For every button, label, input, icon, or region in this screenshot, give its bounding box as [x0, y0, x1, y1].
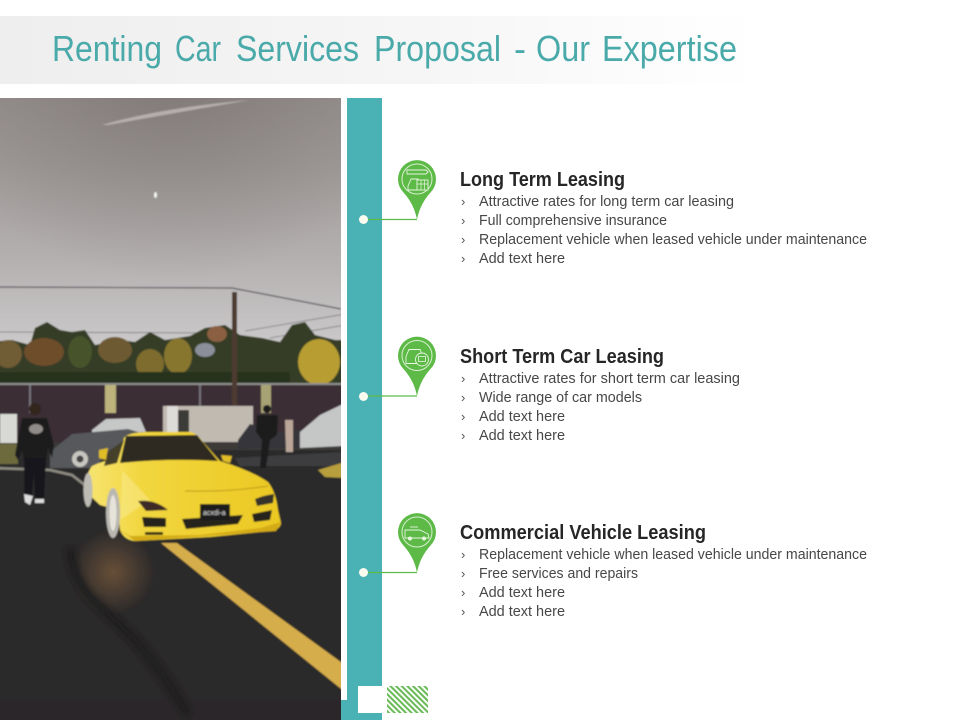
car — [84, 432, 281, 541]
title: Car — [175, 28, 221, 69]
bullet list: › — [461, 213, 465, 228]
bullet list: Replacement vehicle when leased vehicle under maintenance — [479, 232, 867, 248]
connector with dot — [359, 392, 417, 401]
bullet list: › — [461, 232, 465, 247]
bullet list — [461, 371, 740, 444]
item: long term leasing — [359, 160, 867, 267]
car: acxdi-a — [203, 510, 226, 517]
title: - — [514, 28, 526, 69]
title: Expertise — [602, 28, 737, 69]
icon: map pin with car lease — [398, 160, 436, 220]
background cars — [92, 418, 146, 434]
bullet list: Add text here — [479, 604, 565, 620]
bullet list: › — [461, 371, 465, 386]
connector with dot — [359, 215, 417, 224]
bullet list: › — [461, 251, 465, 266]
bullet list: Attractive rates for long term car leasing — [479, 194, 734, 210]
bullet list: › — [461, 194, 465, 209]
heading: Long Term Leasing — [460, 169, 625, 191]
connector with dot — [359, 568, 417, 577]
item: commercial vehicle leasing — [359, 513, 867, 620]
bullet list: › — [461, 585, 465, 600]
bullet list: Add text here — [479, 428, 565, 444]
icon: map pin with van — [398, 513, 436, 572]
bullet list: Attractive rates for short term car leasing — [479, 371, 740, 387]
bullet list: › — [461, 604, 465, 619]
bullet list: Wide range of car models — [479, 390, 642, 406]
bullet list — [461, 194, 867, 267]
person: walking man — [15, 403, 54, 505]
teal vertical bar — [341, 98, 382, 720]
item: short term car leasing — [359, 337, 740, 444]
photo: yellow sports car on road — [0, 85, 350, 720]
title: Services — [236, 28, 359, 69]
title: Our — [536, 28, 590, 69]
hatched square — [387, 686, 428, 713]
bullet list: › — [461, 547, 465, 562]
white square — [358, 686, 384, 713]
bullet list: › — [461, 390, 465, 405]
icon: map pin with cars — [398, 337, 436, 396]
bullet list: › — [461, 428, 465, 443]
bullet list: Full comprehensive insurance — [479, 213, 667, 229]
bullet list: Add text here — [479, 409, 565, 425]
bullet list: › — [461, 566, 465, 581]
bullet list: › — [461, 409, 465, 424]
bullet list: Add text here — [479, 585, 565, 601]
heading: Short Term Car Leasing — [460, 346, 664, 368]
road stripe — [161, 543, 345, 692]
person: distant man — [256, 405, 278, 468]
bullet list: Free services and repairs — [479, 566, 638, 582]
bullet list: Replacement vehicle when leased vehicle under maintenance — [479, 547, 867, 563]
heading: Commercial Vehicle Leasing — [460, 522, 706, 544]
title band — [0, 16, 760, 84]
bullet list — [461, 547, 867, 620]
title: Renting — [52, 28, 162, 69]
title: Proposal — [374, 28, 501, 69]
bullet list: Add text here — [479, 251, 565, 267]
